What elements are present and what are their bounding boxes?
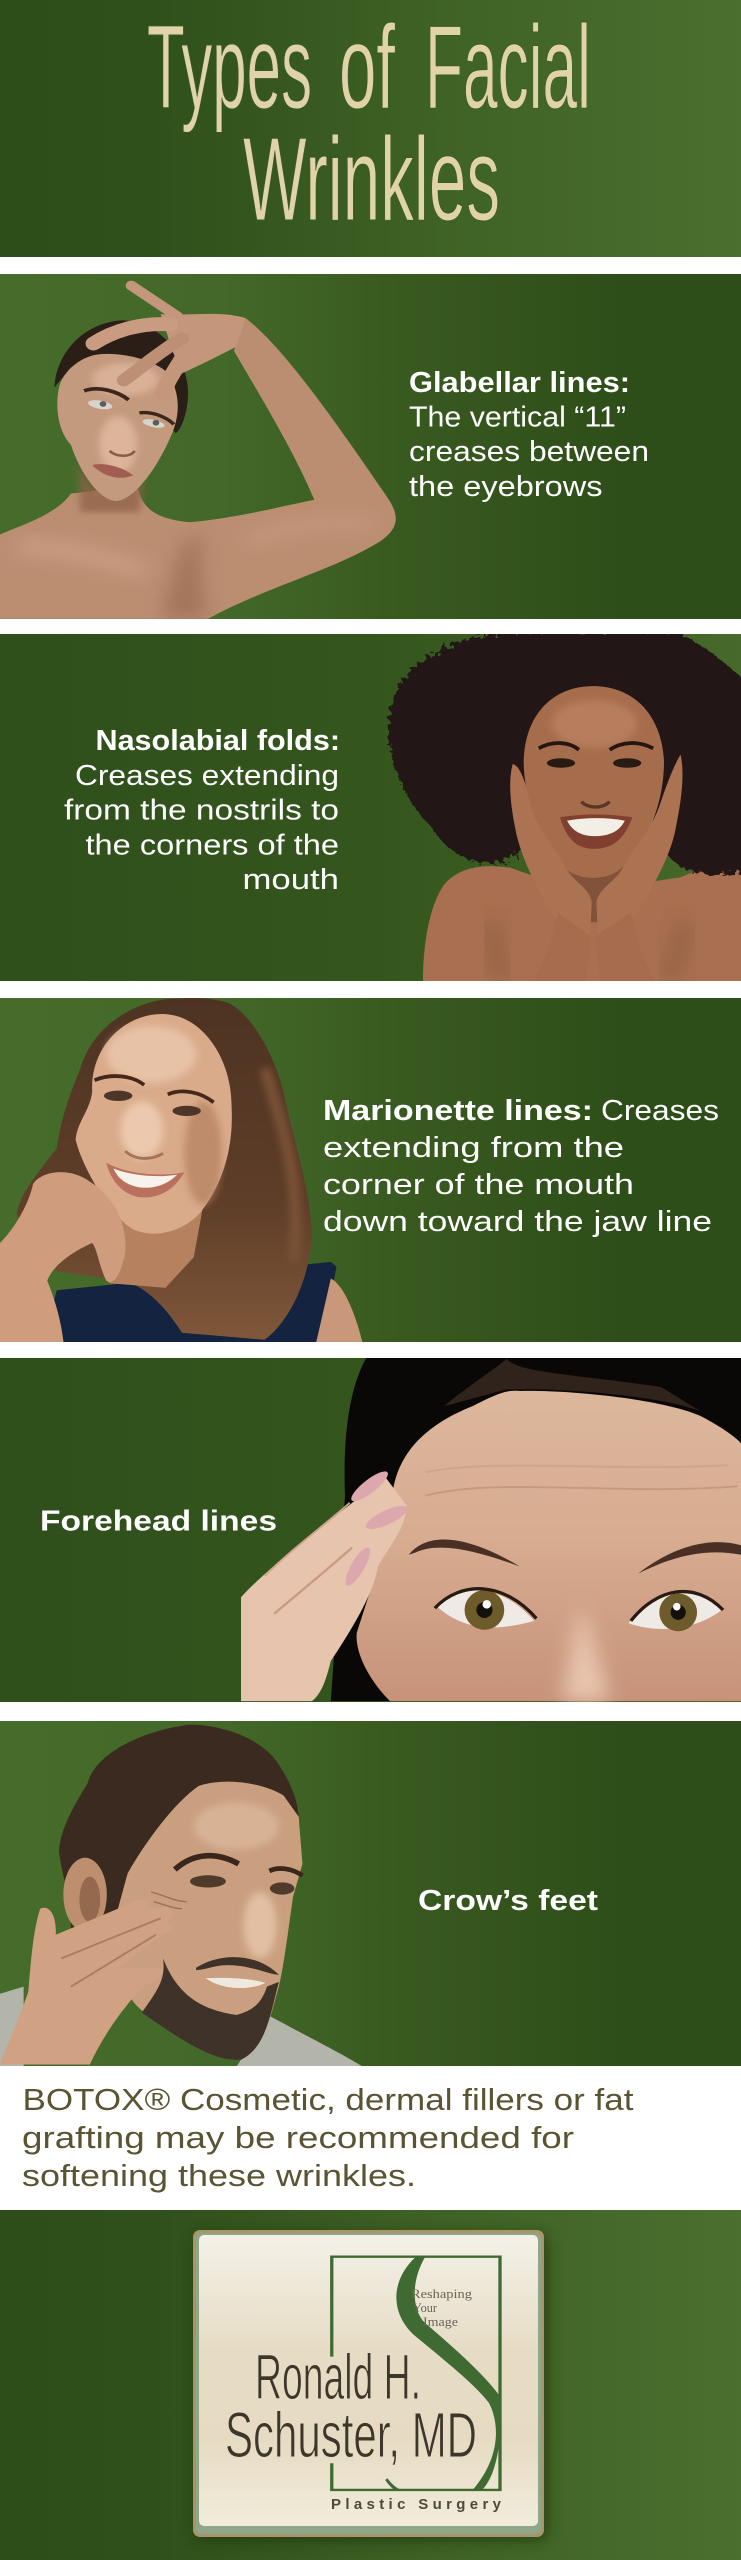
text: glabellar lines: creases between [409,436,649,468]
logo text: Image [423,2314,458,2329]
text: nasolabial folds: from the nostrils to [64,794,339,826]
header panel [0,0,741,257]
text: forehead lines: Forehead lines [40,1506,277,1538]
text: marionette lines: Marionette lines: [323,1095,593,1127]
text: glabellar lines: Glabellar lines: [409,367,630,399]
text: marionette lines: extending from the [323,1132,624,1164]
logo text [225,2286,502,2513]
photo: woman touching forehead [0,286,396,619]
text: nasolabial folds [64,725,340,896]
text: nasolabial folds: the corners of the [86,830,339,862]
text block: treatment note: softening these wrinkles. [22,2158,416,2193]
title: of [339,1,396,134]
title: Facial [425,1,591,134]
text: marionette lines: Creases [601,1095,719,1127]
text: nasolabial folds: Nasolabial folds: [96,725,340,757]
text: glabellar lines [409,367,649,503]
photo: man touching crow's feet [0,1725,362,2067]
text: glabellar lines: The vertical “11” [409,402,626,434]
panel: marionette lines [0,998,741,1345]
footer panel [0,2210,741,2560]
text block: treatment note: BOTOX® Cosmetic, dermal fillers or fat [22,2082,634,2117]
logo text: Ronald H. [255,2341,421,2413]
panel: forehead lines [0,1358,741,1702]
photo: smiling woman resting chin on hand [0,998,363,1345]
panel: nasolabial folds [0,632,741,981]
text: nasolabial folds: Creases extending [75,760,339,792]
logo text: Reshaping [411,2286,473,2301]
text: crow's feet: Crow’s feet [418,1885,598,1917]
logo frame and S mark [332,2257,501,2490]
logo text: Your [413,2300,438,2315]
panel: crow's feet [0,1721,741,2067]
text: marionette lines: down toward the jaw line [323,1206,712,1238]
photo: smiling woman with curly hair [388,632,741,981]
logo text: Plastic Surgery [331,2496,502,2513]
text: glabellar lines: the eyebrows [409,471,602,503]
text block: treatment note [22,2082,634,2193]
title: Wrinkles [243,113,500,246]
panel: glabellar lines [0,274,741,619]
text: marionette lines [323,1095,719,1238]
title: Types [147,1,312,134]
text: nasolabial folds: mouth [242,864,339,896]
text block: treatment note: grafting may be recommended for [22,2120,574,2155]
logo text: Schuster, MD [225,2399,477,2471]
logo: Ronald H. Schuster, MD [193,2230,547,2540]
title [147,1,591,246]
photo: close-up of forehead and eyes [241,1358,741,1701]
text: marionette lines: corner of the mouth [323,1169,634,1201]
